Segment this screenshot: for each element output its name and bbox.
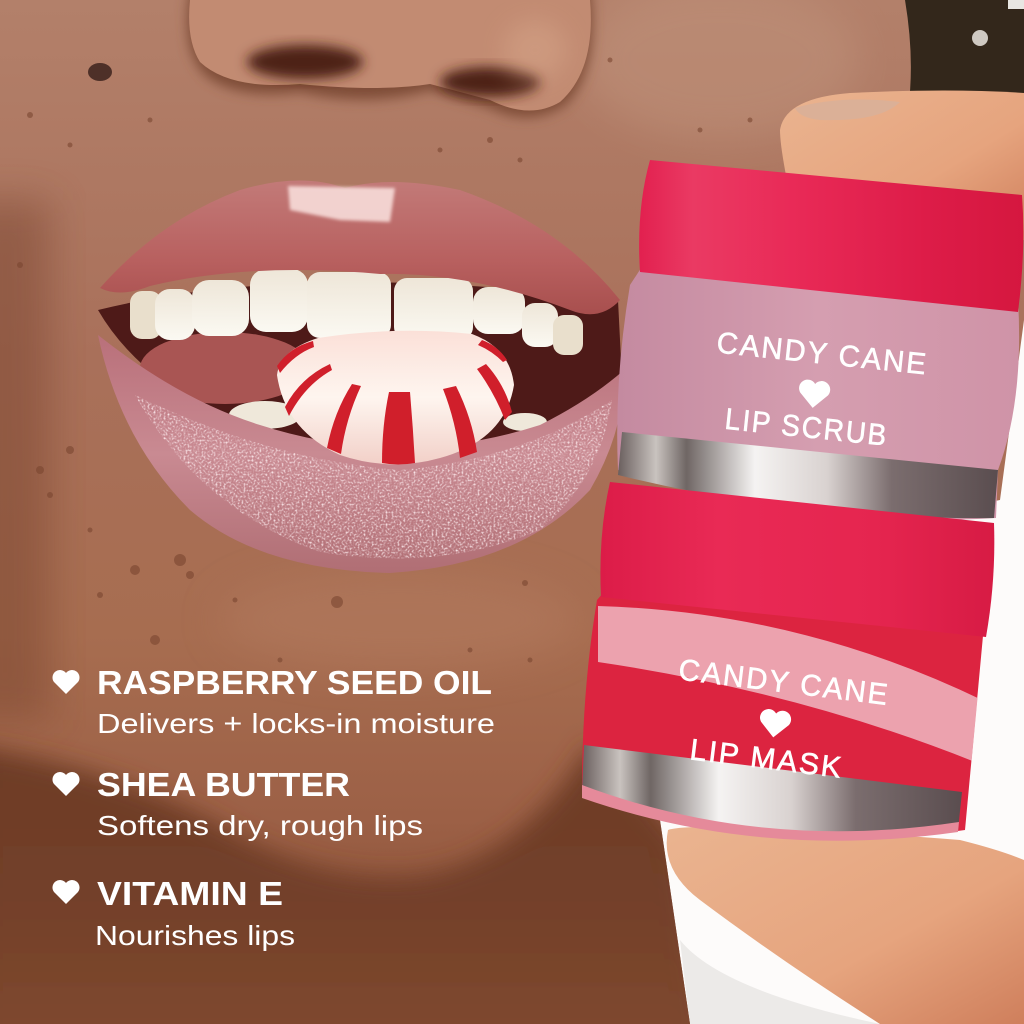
icon: heart [53,880,80,904]
label: lip scrub [707,327,929,456]
jar body: lip mask [582,585,984,839]
photo: fingertip holding jars from above [780,90,1024,240]
photo: lower lip with sugar scrub [98,335,624,573]
photo: neck shadow under jaw [0,745,710,1024]
label: lip scrub: LIP SCRUB [723,403,890,453]
icon: heart [52,772,80,796]
benefit: shea butter: SHEA BUTTER [97,766,350,803]
label: lip mask: CANDY CANE [677,653,891,712]
benefit: raspberry seed oil: Delivers + locks-in moisture [97,708,495,739]
jar swirl: pale band [598,606,982,762]
photo: mouth interior [98,282,622,454]
lid: lip mask [600,482,994,637]
illustration: peppermint candy [277,331,514,464]
jar body: lip scrub [617,262,1019,520]
lid: lip scrub [639,160,1023,312]
jar: lip mask [582,482,994,841]
benefit: raspberry seed oil: RASPBERRY SEED OIL [97,664,492,701]
benefit: vitamin e [53,875,295,951]
jar: lip scrub [617,160,1023,520]
photo: lower teeth [229,401,547,431]
benefit: vitamin e: VITAMIN E [97,875,283,912]
photo: shirt hint [680,940,880,1024]
photo: upper lip gloss [100,180,620,314]
jar base: glass [582,745,962,839]
label: lip mask [667,653,891,789]
photo: tongue [140,332,310,404]
benefit: shea butter [52,766,423,841]
label: lip mask: LIP MASK [688,733,845,785]
photo: hair [900,0,1024,110]
jar base: glass [618,432,998,518]
benefit: shea butter: Softens dry, rough lips [97,810,423,841]
icon: heart [53,670,79,694]
jar base rim [582,785,959,841]
photo: upper teeth [130,269,583,355]
benefit: raspberry seed oil [53,664,495,739]
label: lip scrub: CANDY CANE [715,327,929,382]
photo: thumb holding jars from below [667,827,1024,1024]
benefit: vitamin e: Nourishes lips [95,920,295,951]
photo: nose [187,0,592,117]
